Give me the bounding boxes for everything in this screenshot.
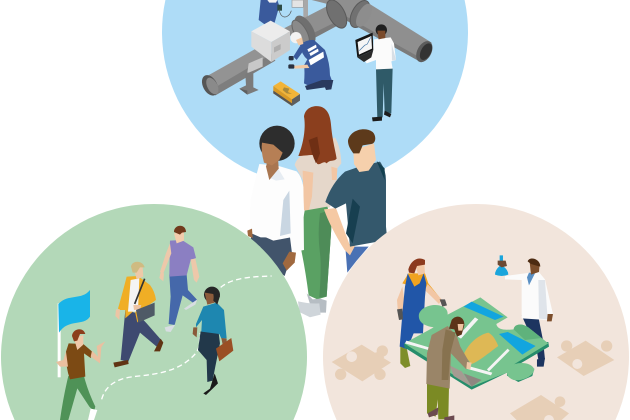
- background puzzle piece: left: [332, 345, 391, 381]
- scene: people walking a path: [56, 226, 272, 420]
- scientist in lab coat: [495, 255, 553, 367]
- woman in teal sweater with briefcase: [193, 287, 233, 395]
- pipes: [199, 0, 436, 98]
- panel: beige circle: [323, 204, 629, 420]
- woman in blue overalls: [397, 258, 447, 368]
- leader in brown top: [56, 329, 105, 420]
- group: three central people: [247, 106, 387, 317]
- background puzzle piece: bottom: [510, 395, 569, 420]
- scene: puzzle collaboration: [332, 255, 614, 420]
- background puzzle piece: right: [557, 340, 614, 376]
- man in teal t-shirt: [324, 129, 387, 273]
- scene: pipeline engineers: [199, 0, 436, 121]
- engineer with laptop: [355, 24, 396, 121]
- panel: blue circle: [162, 0, 468, 185]
- machine box: [251, 21, 290, 62]
- flag: [58, 290, 90, 377]
- woman in white shirt: [247, 126, 304, 276]
- kneeling worker: [288, 32, 333, 90]
- man in purple shirt: [159, 226, 199, 332]
- person behind pipes, top: [259, 0, 308, 25]
- woman in beige top and green trousers: [295, 106, 341, 317]
- man in brown coat: [426, 317, 472, 420]
- panel: green circle: [1, 204, 307, 420]
- dashed path: [102, 276, 272, 399]
- toolbox: [273, 81, 300, 106]
- central puzzle piece map: [404, 297, 549, 390]
- man in yellow jacket: [113, 262, 163, 367]
